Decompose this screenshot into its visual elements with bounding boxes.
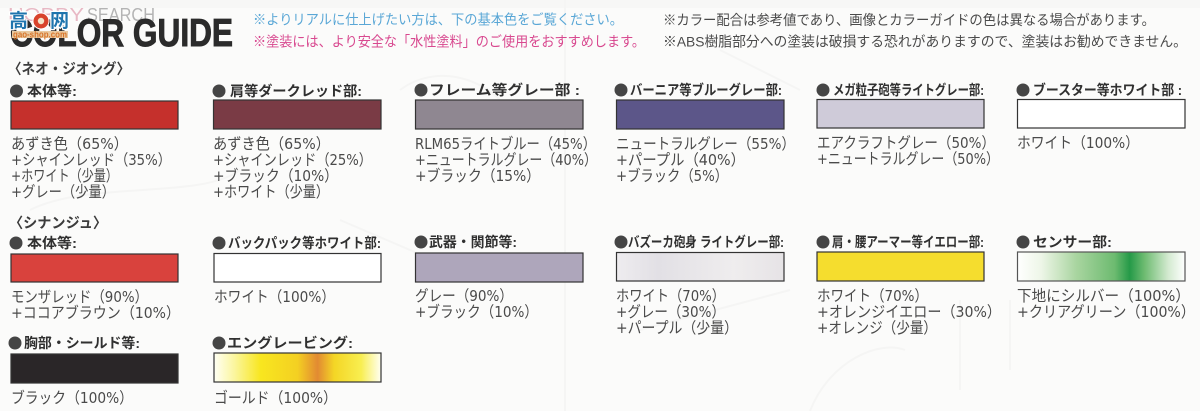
heading: メガ粒子砲等ライトグレー部:: [833, 82, 984, 98]
panel: bazooka barrel light grey: [614, 234, 784, 337]
logo: gao-shop: gao-shop.com: [13, 30, 67, 40]
heading: 本体等:: [27, 83, 77, 99]
note: colour reference: ※カラー配合は参考値であり、画像とカラーガイドの色は異なる場合があります。: [663, 12, 1155, 28]
recipe: [213, 135, 372, 201]
panel: burner blue grey: [614, 82, 795, 185]
swatch: [11, 101, 178, 129]
recipe: +ブラック（15%）: [415, 166, 540, 185]
logo: gao-shop: 高: [9, 10, 28, 32]
logo: gao-shop: 网: [50, 11, 69, 32]
icon: bullet: [1016, 84, 1030, 96]
icon: bullet: [816, 84, 830, 96]
icon: bullet: [10, 236, 22, 250]
recipe: +ココアブラウン（10%）: [11, 303, 180, 322]
recipe: +オレンジ（少量）: [817, 319, 937, 337]
recipe: ホワイト（100%）: [214, 288, 335, 306]
panel: shoulder dark red: [212, 83, 381, 201]
recipe: +グレー（少量）: [11, 183, 115, 201]
note: blue recommendation: ※よりリアルに仕上げたい方は、下の基本色をご覧ください。: [253, 12, 623, 28]
panel: booster white: [1016, 82, 1185, 152]
section heading: 〈シナンジュ〉: [9, 215, 107, 232]
recipe: [817, 287, 1001, 337]
swatch: [416, 100, 583, 129]
heading: フレーム等グレー部 :: [429, 82, 580, 98]
panel: mega particle cannon light grey: [816, 82, 999, 168]
heading: 胸部・シールド等:: [24, 335, 140, 351]
icon: bullet: [614, 84, 628, 96]
recipe: +ブラック（10%）: [213, 166, 338, 185]
panel: sensor: [1016, 234, 1195, 321]
recipe: あずき色（65%）: [11, 135, 128, 153]
recipe: +シャインレッド（35%）: [11, 151, 171, 169]
recipe: ブラック（100%）: [11, 388, 133, 407]
icon: bullet: [8, 336, 22, 350]
recipe: グレー（90%）: [415, 287, 513, 305]
swatch: [616, 100, 784, 129]
recipe: +グレー（30%）: [616, 303, 725, 321]
recipe: +オレンジイエロー（30%）: [817, 303, 1001, 321]
panel: body: [10, 83, 178, 201]
recipe: [11, 135, 171, 201]
swatch: [1018, 252, 1185, 281]
recipe: ゴールド（100%）: [214, 388, 337, 407]
recipe: +ニュートラルグレー（40%）: [415, 151, 597, 169]
icon: bullet: [414, 236, 428, 248]
icon: bullet: [816, 236, 830, 248]
heading: ブースター等ホワイト部 :: [1033, 82, 1182, 98]
icon: bullet: [212, 236, 226, 250]
swatch: [1018, 100, 1185, 128]
heading: バーニア等ブルーグレー部:: [630, 82, 782, 98]
heading: 肩等ダークレッド部:: [230, 83, 362, 99]
icon: bullet: [10, 84, 23, 98]
icon: bullet: [614, 236, 628, 248]
panel: backpack white: [212, 235, 381, 306]
note: pink water-based paint: ※塗装には、より安全な「水性塗料」のご使用をおすすめします。: [253, 34, 645, 50]
recipe: [616, 287, 738, 337]
recipe: 下地にシルバー（100%）: [1017, 287, 1190, 305]
recipe: [817, 134, 999, 168]
watermark: Hobby Search: [8, 5, 155, 25]
heading: 武器・関節等:: [429, 234, 517, 250]
heading: 肩・腰アーマー等イエロー部:: [832, 234, 984, 250]
recipe: +ブラック（10%）: [415, 302, 538, 321]
recipe: [415, 287, 538, 321]
recipe: あずき色（65%）: [213, 135, 330, 153]
icon: bullet: [212, 336, 226, 350]
swatch: [11, 254, 178, 282]
swatch: [817, 100, 984, 128]
recipe: RLM65ライトブルー（45%）: [415, 134, 596, 153]
swatch: [11, 354, 178, 383]
heading: バックパック等ホワイト部:: [228, 235, 381, 251]
recipe: +ニュートラルグレー（50%）: [817, 150, 999, 168]
heading: 本体等:: [27, 235, 77, 251]
heading: エングレービング:: [227, 335, 353, 351]
recipe: ホワイト（100%）: [1017, 134, 1139, 152]
section: Sinanju: [8, 215, 1195, 407]
watermark: Hobby Search: HOBBY: [8, 5, 84, 25]
recipe: エアクラフトグレー（50%）: [817, 134, 995, 152]
watermark: Hobby Search: SEARCH: [87, 5, 155, 25]
logo: gao-shop: [9, 10, 69, 40]
panel: shoulder and waist armour yellow: [816, 234, 1001, 337]
recipe: +パープル（少量）: [616, 319, 738, 337]
recipe: +ホワイト（少量）: [11, 167, 118, 185]
icon: bullet: [1016, 236, 1030, 248]
recipe: +パープル（40%）: [616, 151, 745, 169]
recipe: [1017, 287, 1195, 321]
panel: chest and shield: [8, 335, 178, 407]
recipe: +ホワイト（少量）: [213, 183, 329, 201]
recipe: ニュートラルグレー（55%）: [616, 135, 795, 153]
recipe: [415, 134, 597, 185]
panel: body: [10, 235, 180, 322]
swatch: [817, 252, 984, 281]
recipe: モンザレッド（90%）: [11, 288, 148, 306]
swatch: [214, 100, 381, 129]
icon: bullet: [212, 84, 226, 98]
recipe: +ブラック（5%）: [616, 166, 728, 185]
panel: frame grey: [414, 82, 597, 185]
icon: bullet: [414, 84, 428, 96]
heading: バズーカ砲身 ライトグレー部:: [628, 234, 784, 250]
recipe: [11, 288, 180, 322]
title: COLOR GUIDE: [10, 12, 233, 55]
panel: engraving: [212, 335, 381, 407]
swatch: [214, 254, 381, 282]
recipe: ホワイト（70%）: [616, 287, 725, 305]
swatch: [416, 253, 583, 282]
panel: weapons and joints: [414, 234, 583, 321]
recipe: [616, 135, 795, 185]
section heading: 〈ネオ・ジオング〉: [8, 60, 130, 78]
recipe: ホワイト（70%）: [817, 287, 928, 305]
note: ABS warning: ※ABS樹脂部分への塗装は破損する恐れがありますので、塗装はお勧めできません。: [663, 34, 1187, 50]
heading: センサー部:: [1033, 234, 1112, 250]
recipe: +シャインレッド（25%）: [213, 151, 372, 169]
swatch: [214, 353, 381, 382]
section: Neo Zeong: [8, 60, 1185, 201]
swatch: [616, 252, 784, 281]
